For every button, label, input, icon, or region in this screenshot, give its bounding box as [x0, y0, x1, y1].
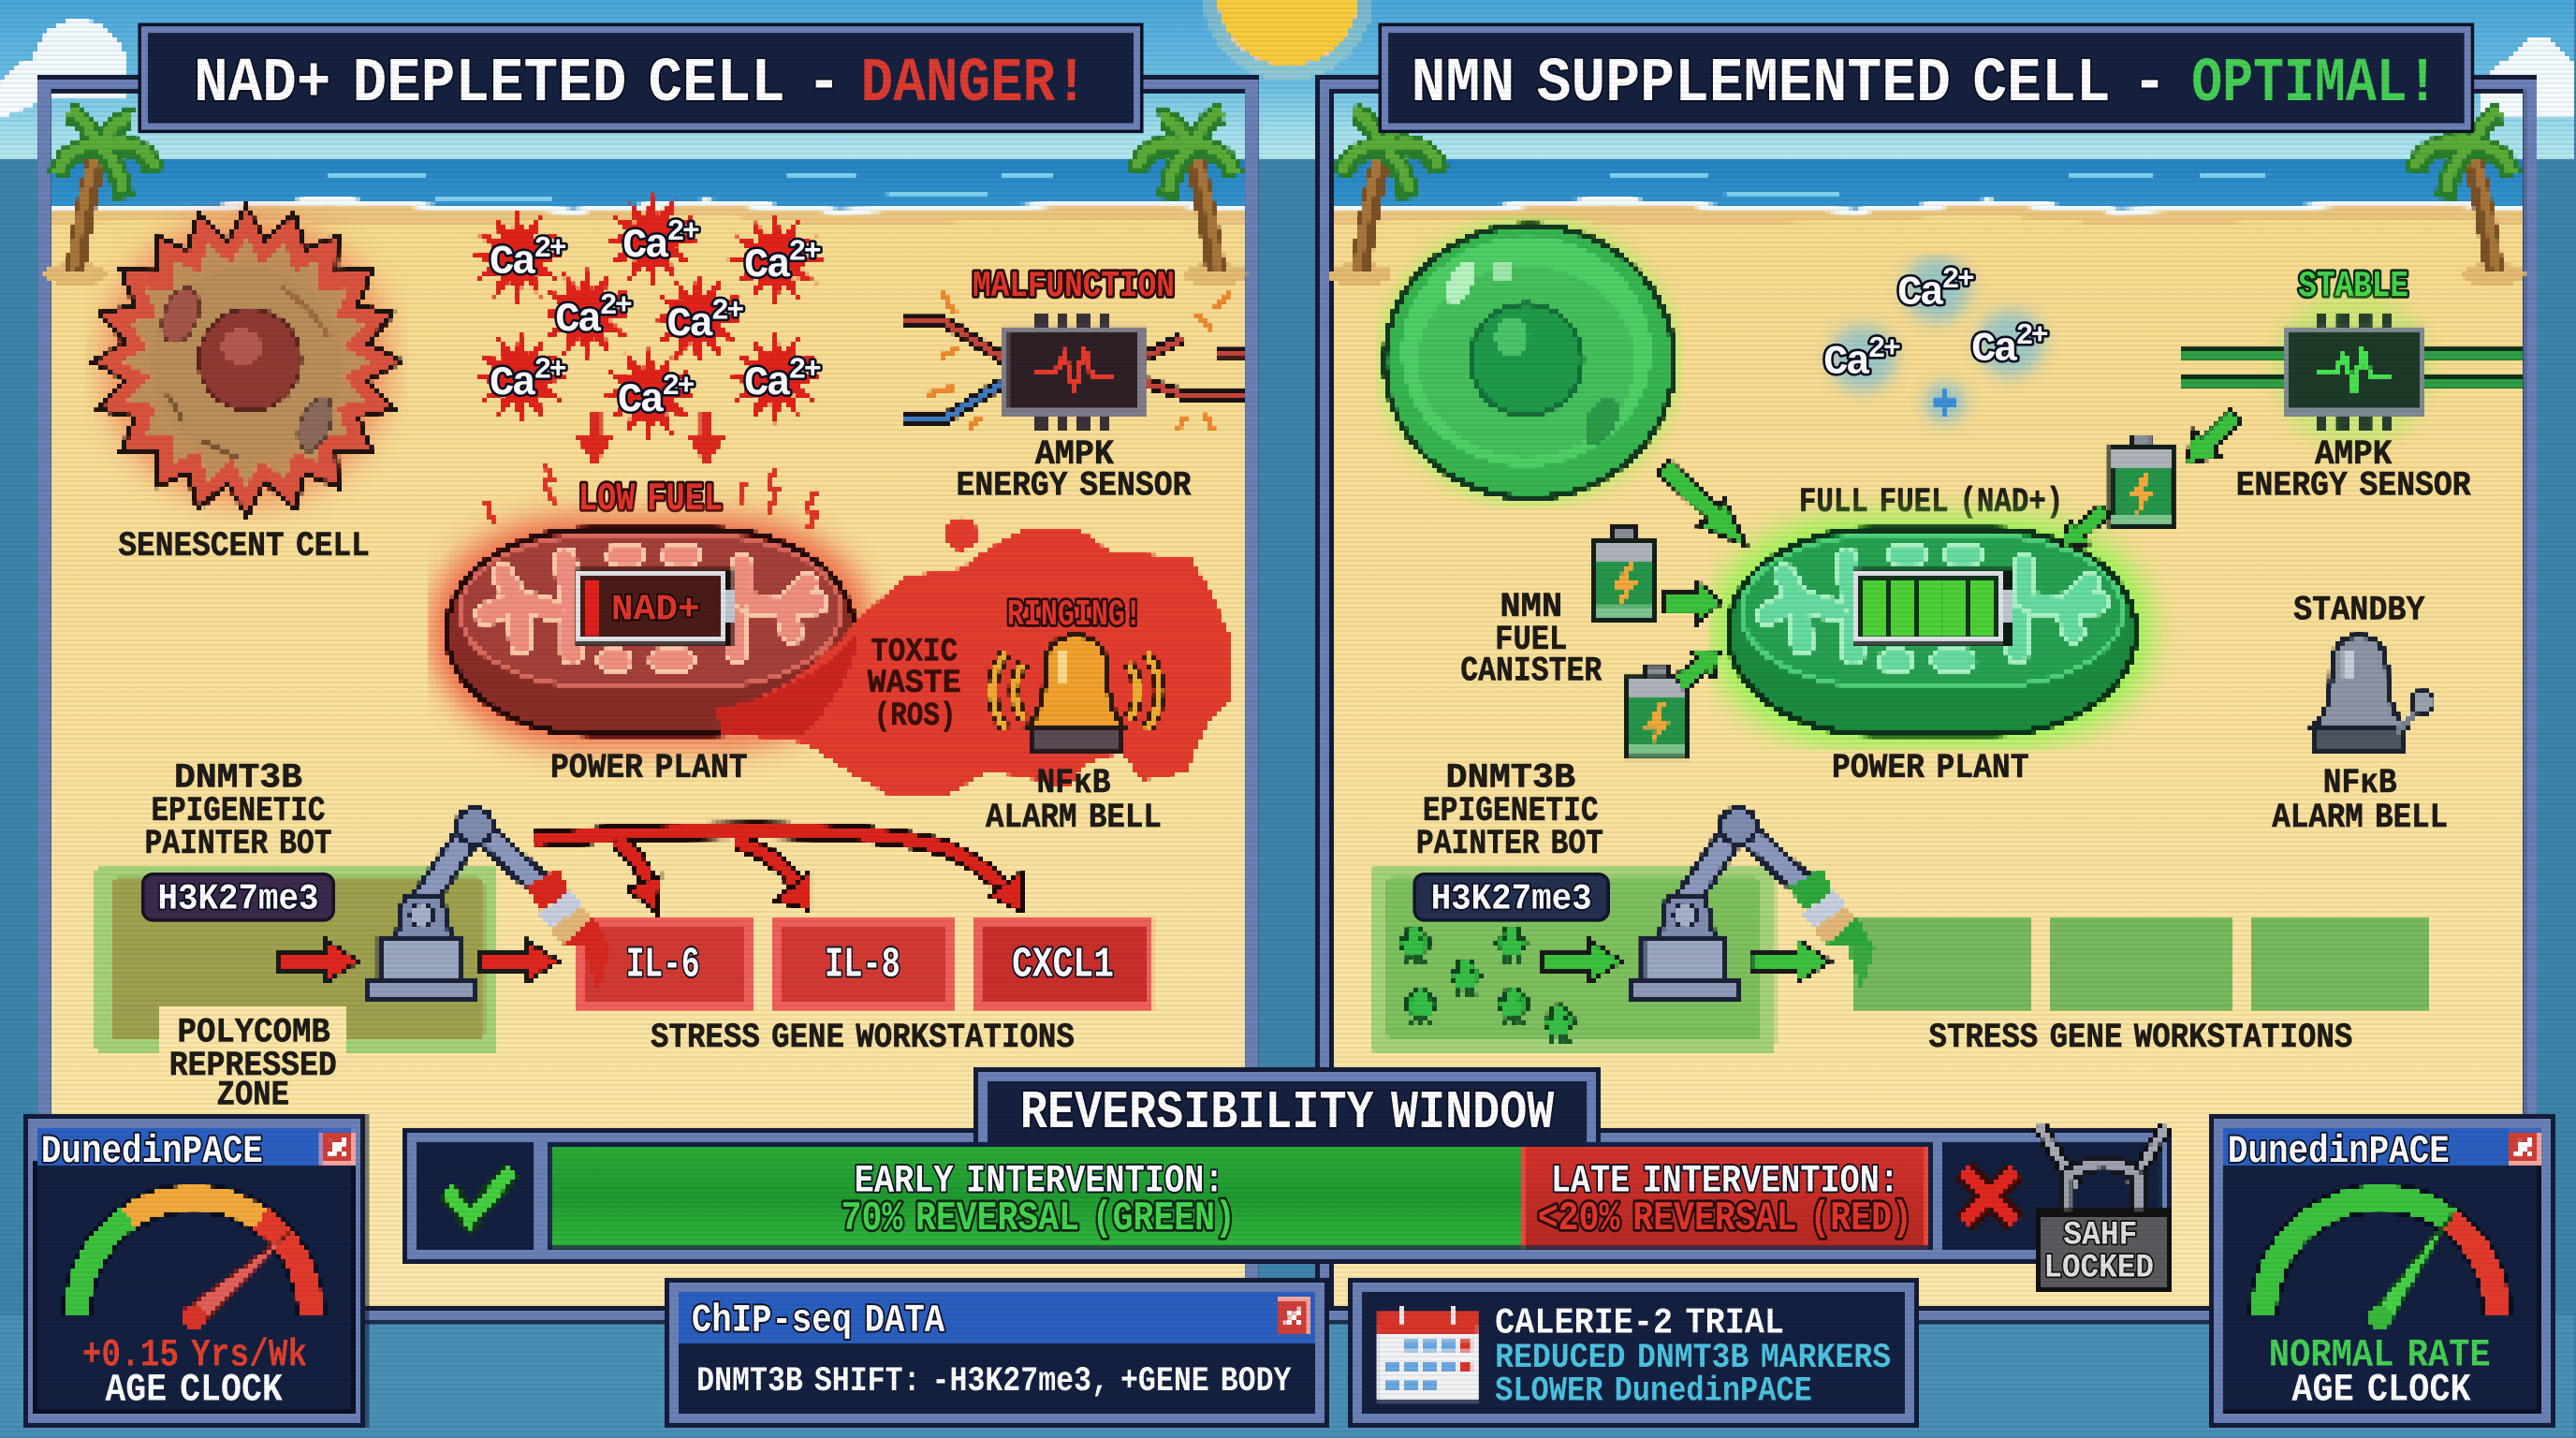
icon: SAHF padlock: LOCKED — [2043, 1250, 2154, 1287]
label: NFkB alarm bell — [986, 764, 1162, 838]
label: NFkB alarm bell: NFκB — [1036, 764, 1110, 803]
labels: Ca2+ ions in depleted cell: Ca — [667, 301, 711, 348]
label: full fuel NAD+: FULL FUEL (NAD+) — [1799, 483, 2063, 522]
labels: Ca2+ ions in depleted cell: 2+ — [667, 216, 699, 249]
panel: NMN supplemented cell — [1325, 24, 2530, 1314]
icon: stable AMPK chip — [2182, 291, 2524, 448]
icon: red cross — [1963, 1170, 2016, 1223]
labels: Ca2+ ions in depleted cell: Ca — [490, 239, 534, 286]
icon: senescent cell — [87, 202, 406, 521]
label: polycomb repressed zone: POLYCOMB — [178, 1014, 330, 1053]
label: AMPK energy sensor: ENERGY SENSOR — [956, 466, 1192, 506]
icon: depleted mitochondrion power plant — [431, 516, 871, 748]
label: H3K27me3 tag left: H3K27me3 — [157, 879, 318, 920]
arrows: green flows into power plant — [1651, 402, 2248, 697]
label: low fuel warning: LOW FUEL — [578, 477, 723, 521]
bar frame and tab — [406, 1071, 2170, 1262]
heading: NMN supplemented cell optimal: OPTIMAL! — [2191, 49, 2438, 120]
label: DNMT3B epigenetic painter bot — [144, 759, 332, 864]
text: CALERIE-2 trial — [1495, 1302, 1891, 1411]
heading: NMN supplemented cell optimal — [1380, 24, 2472, 131]
icons: calm calcium ions glow — [1830, 257, 2043, 422]
window: CALERIE-2 trial — [1349, 1282, 1915, 1425]
heading: NAD+ depleted cell danger: NAD+ DEPLETED CELL - — [194, 49, 842, 120]
labels: Ca2+ ions in depleted cell: Ca — [555, 297, 600, 344]
text: early intervention: 70% REVERSAL (GREEN) — [842, 1196, 1236, 1242]
icon: palm trees left panel — [44, 110, 1247, 286]
label: stress gene workstations right: STRESS GENE WORKSTATIONS — [1928, 1019, 2352, 1058]
labels: Ca2+ ions in depleted cell: Ca — [744, 242, 788, 289]
label: toxic waste ROS: WASTE — [868, 665, 961, 702]
labels: Ca2+ ions in depleted cell: Ca — [622, 223, 667, 270]
labels: Ca2+ ions in depleted cell: Ca — [744, 360, 788, 407]
label: NAD+ battery text: NAD+ — [611, 590, 700, 631]
label: NMN fuel canister: NMN — [1500, 588, 1562, 627]
label: power plant right: POWER PLANT — [1832, 749, 2029, 788]
labels: Ca2+ ions in supplemented cell: Ca — [1971, 326, 2015, 373]
text: DNMT3B shift: DNMT3B SHIFT: -H3K27me3, +GENE BODY — [696, 1362, 1292, 1401]
label: toxic waste ROS — [868, 634, 961, 735]
icon: charged mitochondrion power plant — [1712, 516, 2152, 748]
icon: ringing NFkB alarm bell — [992, 636, 1160, 753]
panel frame right — [1325, 84, 2530, 1314]
text: CALERIE-2 trial: REDUCED DNMT3B MARKERS — [1495, 1339, 1891, 1378]
readout: age clock normal: AGE CLOCK — [2291, 1367, 2471, 1412]
label: polycomb repressed zone: REPRESSED — [169, 1047, 337, 1086]
icon: painter robot red — [366, 809, 611, 1001]
arrows: branching activation arrows — [535, 830, 1022, 914]
window: DunedinPACE supplemented gauge — [2211, 1117, 2552, 1425]
icons: NMN fuel canisters — [1593, 435, 2172, 757]
readout: age clock fast: AGE CLOCK — [105, 1367, 284, 1412]
text: late intervention: <20% REVERSAL (RED) — [1538, 1196, 1912, 1242]
title: DunedinPACE: DunedinPACE — [41, 1129, 263, 1174]
window: DunedinPACE depleted gauge — [24, 1117, 365, 1425]
labels: Ca2+ ions in depleted cell: 2+ — [711, 295, 743, 328]
icon: painter robot green — [1630, 809, 1875, 1001]
label: senescent cell: SENESCENT CELL — [118, 527, 370, 566]
labels: IL-6 IL-8 CXCL1 — [626, 941, 1114, 990]
cloud: toxic waste ROS — [716, 518, 1232, 797]
label: AMPK energy sensor — [956, 435, 1192, 506]
readout: age clock fast — [82, 1332, 307, 1412]
label: DNMT3B epigenetic painter bot: EPIGENETIC — [151, 792, 326, 831]
label: DNMT3B painter bot right: EPIGENETIC — [1423, 792, 1599, 831]
readout: age clock normal — [2269, 1332, 2491, 1412]
text: late intervention — [1538, 1158, 1912, 1242]
icon: silent NFkB bell — [2313, 636, 2433, 753]
label: stable: STABLE — [2298, 266, 2408, 307]
label: polycomb repressed zone: ZONE — [217, 1076, 289, 1115]
labels: Ca2+ ions in depleted cell: Ca — [618, 377, 662, 424]
labels: Ca2+ ions in depleted cell: 2+ — [788, 355, 821, 388]
label: NFkB alarm bell right — [2272, 764, 2448, 838]
labels: IL-6 IL-8 CXCL1: IL-8 — [825, 941, 900, 990]
labels: Ca2+ ions in supplemented cell: Ca — [1823, 339, 1868, 386]
label: power plant left: POWER PLANT — [550, 749, 748, 788]
icons: polycomb clovers — [1399, 927, 1573, 1043]
arrows: calcium down to power plant — [487, 411, 816, 529]
label: malfunction: MALFUNCTION — [973, 266, 1175, 307]
labels: Ca2+ ions in supplemented cell: 2+ — [2015, 320, 2048, 353]
labels: IL-6 IL-8 CXCL1: CXCL1 — [1012, 941, 1114, 990]
readout: age clock normal: NORMAL RATE — [2269, 1332, 2491, 1377]
title: ChIP-seq data: ChIP-seq DATA — [692, 1299, 945, 1343]
panel: healthy polycomb zone — [1370, 864, 1776, 1055]
text: CALERIE-2 trial: CALERIE-2 TRIAL — [1495, 1302, 1784, 1343]
label: NFkB alarm bell right: NFκB — [2323, 764, 2397, 803]
readout: age clock fast: +0.15 Yrs/Wk — [82, 1332, 307, 1377]
label: NMN fuel canister: CANISTER — [1460, 653, 1603, 692]
label: NFkB alarm bell right: ALARM BELL — [2272, 799, 2448, 838]
text: early intervention: EARLY INTERVENTION: — [855, 1158, 1224, 1203]
heading: NMN supplemented cell optimal: NMN SUPPLEMENTED CELL - — [1412, 49, 2167, 120]
arrows: red pathway arrows — [279, 940, 559, 983]
label: AMPK energy sensor: AMPK — [1035, 435, 1115, 475]
label: toxic waste ROS: (ROS) — [874, 697, 956, 735]
text: CALERIE-2 trial: SLOWER DunedinPACE — [1495, 1372, 1812, 1411]
labels: Ca2+ ions in depleted cell: 2+ — [534, 233, 566, 266]
label: AMPK energy sensor right: AMPK — [2315, 435, 2393, 475]
window: ChIP-seq data — [668, 1282, 1325, 1425]
icon: check mark — [446, 1170, 513, 1219]
arrows: green pathway arrows — [1543, 940, 1830, 983]
labels: Ca2+ ions in supplemented cell: 2+ — [1868, 333, 1900, 366]
label: DNMT3B epigenetic painter bot: DNMT3B — [174, 759, 302, 799]
icons: calcium burst cluster — [470, 192, 823, 442]
panel: reversibility window — [406, 1071, 2170, 1290]
labels: Ca2+ ions in depleted cell: 2+ — [534, 355, 566, 388]
text: late intervention: LATE INTERVENTION: — [1551, 1158, 1899, 1203]
icon: SAHF padlock — [2039, 1125, 2169, 1290]
title: DunedinPACE right: DunedinPACE — [2228, 1129, 2450, 1174]
heading: NAD+ depleted cell danger: DANGER! — [861, 49, 1088, 120]
heading: NAD+ depleted cell danger — [139, 24, 1142, 131]
label: H3K27me3 tag right: H3K27me3 — [1431, 879, 1592, 920]
labels: Ca2+ ions in supplemented cell: 2+ — [1942, 264, 1974, 297]
label: NFkB alarm bell: ALARM BELL — [986, 799, 1162, 838]
labels: Ca2+ ions in depleted cell: Ca — [490, 360, 534, 407]
icon: SAHF padlock: SAHF — [2063, 1217, 2137, 1255]
label: AMPK energy sensor right — [2236, 435, 2471, 506]
label: DNMT3B painter bot right — [1416, 759, 1603, 864]
labels: Ca2+ ions in depleted cell — [490, 216, 821, 424]
label: NMN fuel canister: FUEL — [1495, 621, 1567, 660]
label: NMN fuel canister — [1460, 588, 1603, 692]
labels: IL-6 IL-8 CXCL1: IL-6 — [626, 941, 700, 990]
icon: palm trees right panel — [1329, 110, 2525, 286]
label: toxic waste ROS: TOXIC — [871, 634, 958, 671]
label: standby: STANDBY — [2293, 592, 2425, 631]
panel: stress gene workstations red — [575, 917, 1153, 1009]
labels: Ca2+ ions in depleted cell: 2+ — [662, 371, 695, 404]
label: DNMT3B painter bot right: DNMT3B — [1445, 759, 1575, 799]
labels: Ca2+ ions in supplemented cell: Ca — [1897, 271, 1942, 317]
panel: NAD+ depleted cell — [44, 24, 1251, 1314]
icon: calendar — [1379, 1306, 1477, 1401]
icon: malfunctioning AMPK chip — [903, 292, 1245, 431]
text: early intervention — [842, 1158, 1236, 1242]
labels: Ca2+ ions in depleted cell: 2+ — [788, 236, 821, 269]
labels: Ca2+ ions in depleted cell: 2+ — [600, 290, 632, 323]
panel frame left — [44, 84, 1251, 1314]
label: polycomb repressed zone — [169, 1014, 337, 1115]
heading: reversibility window: REVERSIBILITY WINDOW — [1020, 1083, 1555, 1144]
panel: polycomb repressed zone — [94, 864, 498, 1058]
label: DNMT3B epigenetic painter bot: PAINTER BOT — [144, 825, 332, 864]
labels: Ca2+ ions in supplemented cell — [1823, 264, 2048, 386]
label: AMPK energy sensor right: ENERGY SENSOR — [2236, 466, 2471, 506]
panel: silent stress workstations — [1852, 917, 2430, 1009]
label: DNMT3B painter bot right: PAINTER BOT — [1416, 825, 1603, 864]
icon: healthy cell — [1379, 217, 1680, 506]
label: ringing alert: RINGING! — [1007, 594, 1142, 636]
label: stress gene workstations left: STRESS GENE WORKSTATIONS — [651, 1019, 1075, 1058]
